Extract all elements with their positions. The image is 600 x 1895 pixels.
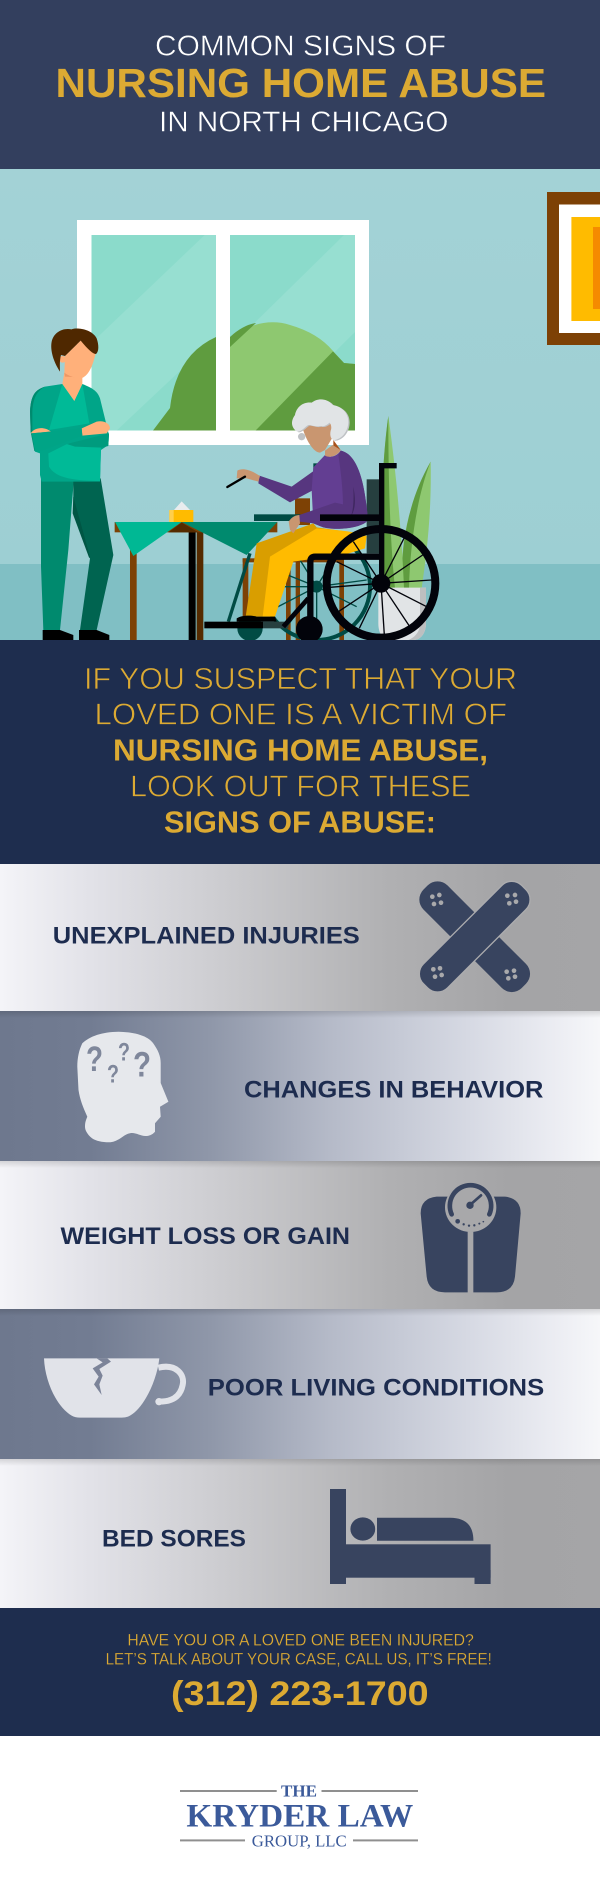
title line: in north chicago: IN NORTH CHICAGO xyxy=(159,107,448,139)
intro text line 1: IF YOU SUSPECT THAT YOUR xyxy=(84,661,517,696)
cta line 2: LET’S TALK ABOUT YOUR CASE, CALL US, IT’S FREE! xyxy=(106,1650,492,1668)
icon: head with question marks: ? xyxy=(118,1038,130,1066)
footrest and shoes xyxy=(237,616,277,622)
header panel xyxy=(0,0,600,169)
logo: the kryder law group xyxy=(0,1736,600,1895)
label: CHANGES IN BEHAVIOR xyxy=(244,1077,543,1104)
dining chair xyxy=(243,498,344,640)
sign 4: poor living conditions xyxy=(0,1309,600,1459)
sign 1: unexplained injuries xyxy=(0,864,600,1011)
wheelchair frame and wheel xyxy=(283,466,435,638)
sign 5: bed sores xyxy=(0,1459,600,1608)
icon: head with question marks: ? xyxy=(86,1040,103,1079)
title line: common signs of: COMMON SIGNS OF xyxy=(155,30,446,62)
intro text line 5: SIGNS OF ABUSE: xyxy=(164,805,436,840)
extended hand and pen xyxy=(237,469,260,482)
icon: head with question marks: ? xyxy=(107,1060,119,1088)
label: UNEXPLAINED INJURIES xyxy=(53,922,360,949)
upper body xyxy=(258,399,367,533)
icon: cracked cup xyxy=(44,1358,183,1418)
title line: nursing home abuse: NURSING HOME ABUSE xyxy=(56,60,546,106)
logo: the kryder law group: KRYDER LAW xyxy=(186,1799,413,1835)
icon: person in bed xyxy=(330,1489,491,1584)
icon: bathroom scale xyxy=(421,1183,521,1292)
sign 3: weight loss or gain xyxy=(0,1161,600,1309)
icon: head with question marks xyxy=(77,1032,168,1142)
window with hills xyxy=(77,220,369,445)
icon: head with question marks: ? xyxy=(133,1046,151,1084)
illustration: nursing home room xyxy=(0,169,600,643)
trousers xyxy=(246,523,347,617)
icon: crossed bandages xyxy=(414,876,536,998)
intro text line 4: LOOK OUT FOR THESE xyxy=(130,769,471,804)
phone number: (312) 223-1700 xyxy=(171,1675,429,1713)
cta line 1: HAVE YOU OR A LOVED ONE BEEN INJURED? xyxy=(127,1631,474,1649)
intro text line 2: LOVED ONE IS A VICTIM OF xyxy=(94,696,507,732)
rear teal wheel xyxy=(226,550,372,640)
label: POOR LIVING CONDITIONS xyxy=(208,1375,544,1402)
logo: the kryder law group: THE xyxy=(281,1782,317,1801)
table with tissue box xyxy=(115,501,277,642)
intro text line 3: NURSING HOME ABUSE, xyxy=(113,733,488,768)
label: WEIGHT LOSS OR GAIN xyxy=(60,1223,350,1250)
nurse xyxy=(30,328,113,640)
sign 2: changes in behavior xyxy=(0,1011,600,1161)
intro panel xyxy=(0,640,600,864)
framed picture xyxy=(547,192,600,345)
logo: the kryder law group: GROUP, LLC xyxy=(252,1832,347,1851)
resident in wheelchair xyxy=(204,399,435,643)
label: BED SORES xyxy=(102,1525,246,1552)
plant in pot xyxy=(378,416,431,640)
call to action panel xyxy=(0,1608,600,1736)
